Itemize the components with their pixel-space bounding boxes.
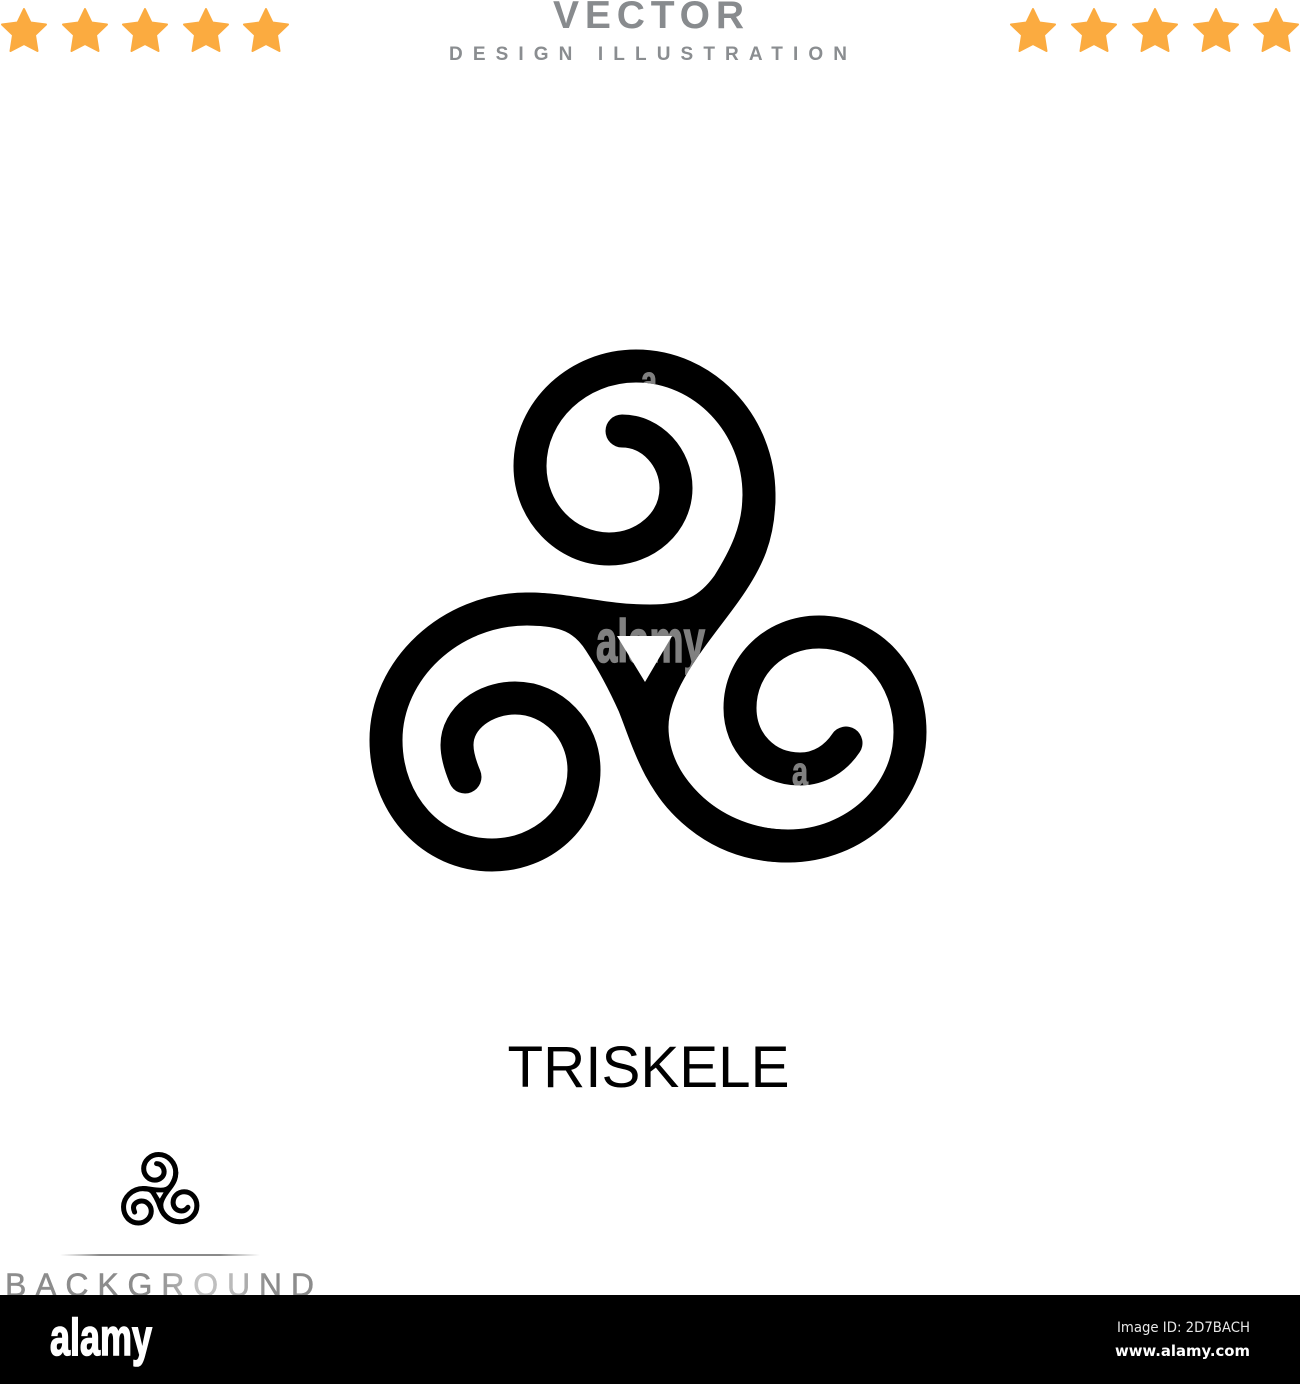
title: TRISKELE: TRISKELE (508, 1035, 790, 1100)
divider line (60, 1254, 260, 1256)
website: www.alamy.com (1115, 1342, 1250, 1360)
label: BACKGROUND: BACKGROUND (5, 1267, 314, 1303)
watermark: alamy centre: alamy (596, 608, 705, 675)
subheading: DESIGN ILLUSTRATION: DESIGN ILLUSTRATION (449, 44, 847, 65)
watermark: right letter: a (792, 750, 809, 794)
icon: large triskele spiral (386, 359, 910, 855)
left star rating (2, 9, 288, 51)
central black fill (590, 590, 732, 765)
footer band (0, 1295, 1300, 1384)
icon: small triskele (124, 1155, 197, 1223)
right star rating (1011, 9, 1298, 51)
central white triangle (617, 636, 672, 682)
alamy logo: alamy (50, 1309, 152, 1367)
watermark: top letter: a (641, 359, 658, 403)
image id: Image ID: 2D7BACH (1117, 1320, 1250, 1336)
